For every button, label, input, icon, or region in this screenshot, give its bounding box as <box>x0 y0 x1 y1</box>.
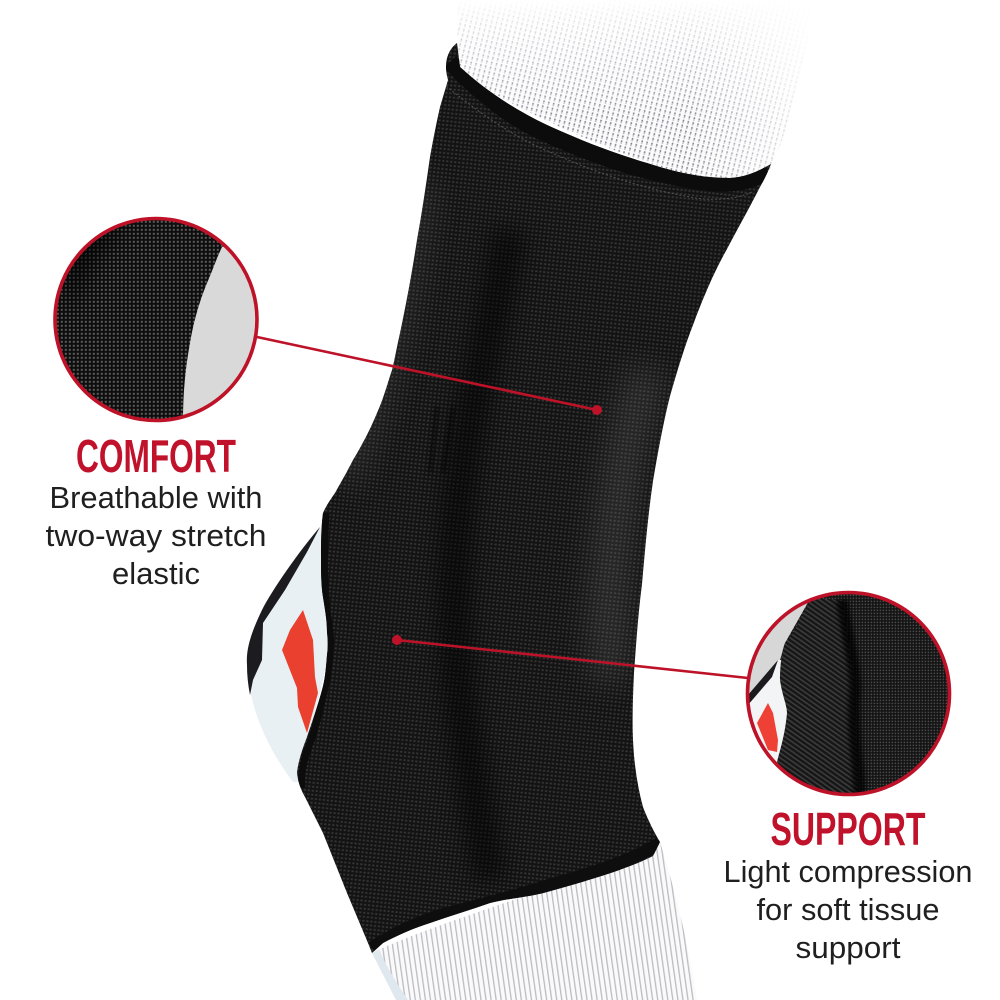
comfort description: elastic <box>112 556 200 591</box>
heading: comfort: COMFORT <box>76 430 236 482</box>
support description: support <box>796 930 901 965</box>
upper sock <box>450 0 820 185</box>
ankle sleeve <box>297 43 771 953</box>
top hem <box>450 62 767 183</box>
lighter fabric highlights <box>609 370 650 680</box>
support description <box>724 854 972 965</box>
heel seam <box>302 513 330 788</box>
support description: Light compression <box>724 854 972 889</box>
text: comfort <box>46 430 266 591</box>
magnifier: support fabric <box>745 590 950 795</box>
comfort description: Breathable with <box>50 480 262 515</box>
red patch <box>757 703 778 752</box>
heel red patch <box>282 610 318 733</box>
ribbed fabric <box>777 598 858 795</box>
heel panel <box>247 527 330 782</box>
dark seam <box>842 600 860 795</box>
lower sock <box>372 842 697 1000</box>
magnifier: comfort fabric <box>55 218 260 420</box>
callout line: comfort <box>257 337 602 415</box>
black stripe <box>748 660 778 705</box>
darker seams <box>455 230 510 880</box>
text: support <box>724 803 972 965</box>
callout line: support <box>392 635 748 678</box>
white heel area <box>750 660 787 764</box>
heading: support: SUPPORT <box>770 803 926 855</box>
comfort description: two-way stretch <box>46 518 266 553</box>
grey background <box>749 603 808 694</box>
heel white base <box>247 527 330 782</box>
comfort description <box>46 480 266 591</box>
heel black stripe <box>247 527 320 695</box>
bottom hem <box>372 843 660 948</box>
support description: for soft tissue <box>756 892 940 927</box>
